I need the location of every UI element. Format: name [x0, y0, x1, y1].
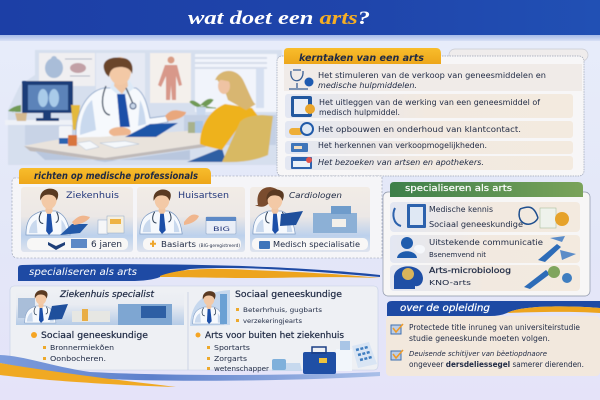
- title: wat doet een arts ?: [188, 8, 370, 29]
- panel: specialiseren als arts (onder): [10, 264, 380, 373]
- medicine bottles: [59, 121, 203, 146]
- panel: richten op medische professionals: [12, 168, 382, 258]
- row 4: Het herkennen van verkoopmogelijkheden.: [318, 141, 487, 150]
- banner: specialiseren als arts: [29, 267, 137, 278]
- card: Huisartsen: (BIG-geregistreerd): [199, 243, 240, 248]
- papers: [77, 141, 139, 150]
- row 1: medische hulpmiddelen.: [318, 81, 417, 90]
- row 3: [285, 121, 573, 138]
- bullet 2: [391, 350, 584, 369]
- card: Huisartsen: Huisartsen: [178, 191, 229, 201]
- monitor: [22, 81, 73, 121]
- row 5: Het bezoeken van artsen en apothekers.: [318, 158, 484, 167]
- room backdrop: [8, 50, 282, 165]
- row: Arts-microbioloog: KNO-arts: [429, 279, 471, 287]
- row 5: [285, 156, 573, 170]
- card: Cardiologen: [250, 187, 370, 252]
- list: sociaal links: [31, 331, 148, 363]
- header band: [0, 0, 600, 41]
- bullet 2: Deuisende schitijver van bèetiopdnaore: [409, 350, 547, 358]
- list: arts voor buiten het ziekenhuis: Sportarts: [214, 344, 250, 352]
- bullet 1: studie geneeskunde moeten volgen.: [409, 334, 550, 343]
- plant left: [8, 105, 27, 121]
- banner: [18, 264, 380, 281]
- row 1: Het stimuleren van de verkoop van geneesmiddelen en: [318, 71, 546, 80]
- row 2: [285, 94, 573, 118]
- doctor chair: [71, 105, 80, 130]
- panel: over de opleiding: [386, 301, 600, 376]
- card: Cardiologen: Medisch specialisatie: [273, 240, 360, 249]
- swoosh bottom: [0, 355, 380, 387]
- row: Uitstekende communicatie: Bsenemvend nit: [429, 251, 486, 259]
- panel body: [10, 286, 378, 370]
- tab: groene kop: [390, 182, 583, 197]
- row: Medische kennis: Medische kennis: [429, 205, 493, 214]
- row 4: [285, 141, 573, 154]
- desk: [24, 130, 210, 162]
- tab: richten heading: [19, 168, 211, 184]
- tablet: [125, 123, 178, 137]
- row: Medische kennis: Sociaal geneeskundige: [429, 220, 523, 229]
- row: Arts-microbioloog: [390, 265, 580, 291]
- bullet 2: ongeveer dersdeliessegel samerer dierenden.: [409, 360, 584, 369]
- plant right: [190, 99, 216, 115]
- patient: [187, 71, 258, 162]
- list: sociaal rechts: [236, 306, 323, 325]
- panel: kerntaken: [277, 48, 588, 176]
- patient chair: [222, 115, 273, 162]
- anatomy poster right: [150, 53, 191, 103]
- row 1: [284, 64, 582, 91]
- panel: specialiseren als arts (onder): Sociaal geneeskundige: [235, 290, 342, 300]
- bullet 1: Protectede title inruneg van universiteirstudie: [409, 323, 580, 332]
- bullet 1: [391, 323, 580, 343]
- card: Cardiologen: Cardiologen: [289, 191, 342, 200]
- tab: kerntaken heading: [284, 48, 441, 64]
- doctor: [76, 57, 186, 138]
- row: Medische kennis: [390, 202, 580, 232]
- list: arts voor buiten het ziekenhuis: Arts voor buiten het ziekenhuis: [205, 331, 345, 341]
- row 3: Het opbouwen en onderhoud van klantcontact.: [318, 125, 521, 134]
- illustration: consultation scene: [5, 50, 282, 165]
- list: arts voor buiten het ziekenhuis: wetenschapper: [214, 365, 269, 373]
- illustration: briefcase and medicine: [272, 341, 377, 374]
- row 2: Het uitleggen van de werking van een geneesmiddel of: [319, 98, 540, 107]
- tab: kerntaken heading: kerntaken van een arts: [299, 53, 424, 64]
- row: Uitstekende communicatie: [390, 235, 580, 263]
- row: Arts-microbioloog: Arts-microbioloog: [429, 266, 511, 275]
- list: arts voor buiten het ziekenhuis: Zorgarts: [214, 355, 247, 363]
- row: Uitstekende communicatie: Uitstekende communicatie: [429, 238, 543, 247]
- list: arts voor buiten het ziekenhuis: [196, 331, 345, 373]
- window: [195, 54, 277, 112]
- shelf: [5, 115, 276, 145]
- card: Huisartsen: [137, 187, 245, 252]
- row 2: medisch hulpmiddel.: [319, 108, 400, 117]
- list: sociaal rechts: Beterhrhuis, gugbarts: [243, 306, 323, 314]
- card: Ziekenhuis: Ziekenhuis: [66, 191, 120, 201]
- list: sociaal links: Oonbocheren.: [50, 355, 106, 363]
- list: sociaal links: Sociaal geneeskundige: [41, 331, 148, 341]
- list: sociaal rechts: verzekeringjearts: [243, 317, 303, 325]
- card: Ziekenhuis: 6 jaren: [91, 240, 122, 250]
- card: Huisartsen: BIG: [213, 225, 230, 233]
- illustration: ziekenhuis specialist: [16, 290, 184, 325]
- illustration: sociaal geneeskundige: [190, 290, 230, 326]
- card: Huisartsen: Basiarts: [161, 240, 196, 249]
- anatomy poster left: [39, 53, 95, 86]
- list: sociaal links: Bronnermiekðen: [50, 344, 114, 352]
- tab: groene kop: specialiseren als arts: [405, 184, 512, 194]
- tab: richten heading: richten op medische professionals: [34, 171, 198, 182]
- card: Ziekenhuis: [21, 187, 133, 252]
- panel: specialiseren als arts (onder): Ziekenhuis specialist: [59, 290, 155, 300]
- banner: opleiding: [387, 301, 600, 316]
- banner: opleiding: over de opleiding: [400, 303, 490, 314]
- panel: specialiseren als arts (groen): [383, 182, 590, 296]
